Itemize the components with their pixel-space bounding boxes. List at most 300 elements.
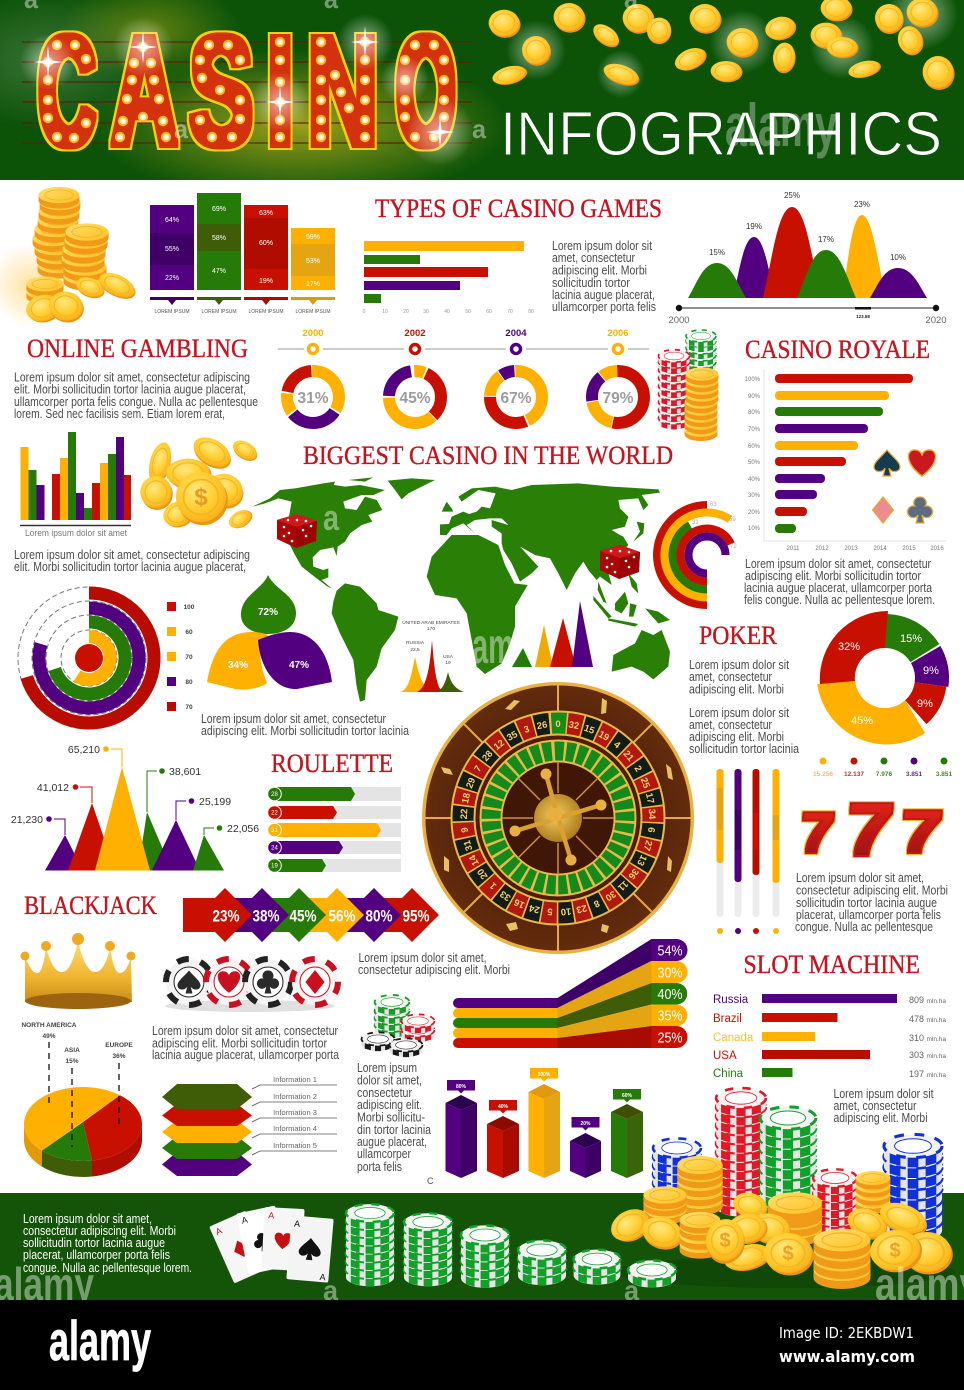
text block: narrow column: consectetur (357, 1086, 412, 1100)
wheel numbers: 29 (464, 776, 478, 790)
concentric arc chart (657, 502, 737, 605)
stacked bar chart: 60% (259, 240, 273, 247)
hexagon layers chart: Information 5 (273, 1141, 317, 1150)
text block: games: ullamcorper porta felis (552, 300, 656, 314)
card: ace of spades (286, 1215, 334, 1283)
peak callout chart (11, 744, 259, 870)
wheel numbers: 30 (603, 888, 618, 903)
donut 67% (490, 371, 542, 423)
percent arrow banner: 23% (212, 906, 240, 926)
header band (0, 0, 964, 200)
watermarks on map: am (472, 618, 514, 674)
credit text: url: www.alamy.com (779, 1347, 915, 1366)
donut 45% (389, 371, 441, 423)
country bar chart: 310 mln.ha (909, 1033, 946, 1043)
text block: chips: adipiscing elit. Morbi sollicitudin tortor (152, 1036, 327, 1050)
heading: roulette: ROULETTE (271, 749, 393, 778)
watermarks on map (323, 497, 514, 674)
wheel numbers: 11 (615, 878, 630, 893)
rounded horizontal bar chart: 70% (748, 427, 761, 433)
mini peak chart: countries: 19 (445, 660, 451, 666)
percent arrow banner: 45% (290, 906, 316, 926)
area peak chart 2000-2020: 25% (784, 191, 800, 200)
stacked bar chart: 22% (165, 275, 179, 282)
wheel numbers: 15 (582, 723, 597, 737)
bar 20%: 20% (580, 1121, 591, 1127)
poker legend: 3.851 (906, 771, 923, 778)
text block: footer band (23, 1212, 192, 1275)
text block: center: consectetur adipiscing elit. Morbi (358, 963, 510, 977)
world map (252, 477, 670, 702)
grouped bar chart: Lorem ipsum dolor sit amet (25, 528, 127, 538)
wheel numbers: 1 (487, 879, 499, 891)
roulette arrow bars: 28 (271, 792, 278, 798)
illustration: gold coin pile (606, 1156, 953, 1289)
peak callout chart: 38,601 (169, 766, 201, 778)
area peak chart 2000-2020: 17% (818, 235, 834, 244)
icon: spade (874, 450, 900, 476)
grouped bar chart (20, 432, 131, 538)
horizontal bar chart: 80 (528, 309, 534, 315)
concentric arc chart: 59 (729, 517, 736, 523)
text block: online gambling (14, 370, 258, 421)
ribbon chart: 54% (658, 942, 682, 960)
rounded horizontal bar chart: 2012 (815, 546, 829, 552)
title: casino marquee: N (307, 3, 378, 179)
area peak chart 2000-2020 (668, 191, 947, 326)
text block: games: sollicitudin tortor (552, 276, 630, 290)
wheel numbers: 6 (645, 827, 657, 833)
donut 67%: 67% (500, 390, 532, 407)
text block: footer band: sollicitudin tortor lacinia augue (23, 1236, 165, 1250)
title: casino marquee: C (38, 4, 96, 179)
stacked bar chart: 64% (165, 217, 179, 224)
text block: chips: Lorem ipsum dolor sit amet, consectetur (152, 1024, 338, 1038)
stacked bar chart: 58% (212, 235, 226, 242)
text block: map: Lorem ipsum dolor sit amet, consectetur (201, 712, 386, 726)
text block: narrow column: Morbi sollicitu- (357, 1110, 425, 1124)
ribbon chart: 40% (658, 986, 682, 1003)
stacked bar chart: 17% (306, 281, 320, 288)
heading: types of casino games: TYPES OF CASINO GAMES (375, 194, 662, 223)
3d pie chart: EUROPE (105, 1042, 133, 1049)
icon: die over asia (600, 545, 640, 579)
horizontal bar chart: 40 (444, 309, 450, 315)
rounded horizontal bar chart: 90% (748, 394, 761, 400)
text block: center: Lorem ipsum dolor sit amet, (358, 951, 486, 965)
heading: online gambling: ONLINE GAMBLING (27, 334, 248, 363)
text block: map: adipiscing elit. Morbi sollicitudin tortor lacinia (201, 724, 409, 738)
poker legend: 7.976 (876, 771, 893, 778)
title: casino marquee: A (111, 4, 178, 179)
poker donut chart: 32% (838, 641, 860, 653)
text block: narrow column: ullamcorper (357, 1147, 411, 1161)
peak callout chart: 25,199 (199, 796, 231, 808)
isometric 3d bars (446, 1068, 643, 1178)
petal venn chart (207, 575, 332, 689)
poker donut chart: 9% (923, 665, 939, 677)
mini peak chart: countries: UNITED ARAB EMIRATES (402, 620, 460, 626)
wheel numbers: 26 (536, 720, 548, 732)
wheel numbers: 18 (460, 792, 473, 805)
petal venn chart: 72% (258, 607, 278, 618)
title: infographics: INFOGRAPHICS (500, 100, 942, 169)
text block: royale: Lorem ipsum dolor sit amet, consectetur (745, 557, 931, 571)
country bar chart (713, 994, 946, 1080)
text block: poker: adipiscing elit. Morbi (689, 682, 784, 696)
stacked bar chart: 19% (259, 278, 273, 285)
area peak chart 2000-2020: 19% (746, 222, 762, 231)
wheel numbers: 19 (596, 729, 611, 744)
chip: heart (206, 959, 252, 1005)
text block: narrow column: dolor sit amet, (357, 1074, 422, 1088)
wheel numbers (459, 719, 657, 917)
mini peak chart: countries: RUSSIA (406, 640, 425, 646)
3d pie chart: 49% (42, 1033, 56, 1040)
wheel numbers: 25 (638, 776, 652, 791)
stacked bar chart: 63% (259, 210, 273, 217)
illustration: gold coin stacks (0, 187, 140, 327)
roulette wheel (422, 682, 694, 954)
horizontal bar chart: 0 (363, 309, 366, 315)
concentric arc chart: 31 (692, 520, 699, 526)
roulette arrow bars (268, 787, 401, 872)
bar 40% (487, 1100, 519, 1178)
credit logo: alamy (49, 1309, 151, 1372)
bar 80%: 80% (456, 1084, 467, 1090)
wheel numbers: 22 (459, 809, 470, 820)
3d pie chart: ASIA (64, 1047, 80, 1054)
card: ace of clubs: A (241, 1215, 248, 1226)
wheel numbers: 20 (475, 866, 490, 881)
stacked bar chart: LOREM IPSUM (154, 309, 190, 315)
stacked bar chart: LOREM IPSUM (248, 309, 284, 315)
illustration: scattered coins (140, 431, 261, 532)
mini peak chart: countries (400, 620, 464, 692)
wheel numbers: 24 (527, 902, 541, 915)
petal venn chart: 34% (228, 660, 248, 671)
concentric arc chart: 63 (710, 502, 717, 508)
watermarks in header: alamy (725, 92, 837, 159)
ribbon chart: 25% (658, 1030, 682, 1046)
text block: 777: Lorem ipsum dolor sit amet, (796, 871, 924, 885)
wheel numbers: 13 (634, 853, 649, 867)
illustration: gold coin pile: $ (719, 1230, 731, 1252)
rounded horizontal bar chart: 2016 (930, 546, 944, 552)
text block: narrow column: Lorem ipsum (357, 1061, 417, 1075)
stacked bar chart: 59% (306, 234, 320, 241)
illustration: gold coin pile: $ (889, 1240, 901, 1262)
illustration: crown (20, 933, 136, 1009)
card: ace of hearts: A (268, 1210, 274, 1221)
legend: 70 (185, 704, 193, 711)
illustration: playing cards (209, 1206, 334, 1283)
peak callout chart: 22,056 (227, 823, 259, 835)
wheel numbers: 12 (492, 738, 507, 753)
country bar chart: USA (713, 1050, 737, 1062)
country bar chart: Russia (713, 994, 749, 1006)
rounded horizontal bar chart: 2013 (844, 546, 858, 552)
timeline with donut charts: 2002 (404, 328, 426, 339)
poker donut chart: 15% (900, 633, 922, 645)
text block: poker: adipiscing elit. Morbi (689, 730, 784, 744)
hexagon layers chart (162, 1075, 337, 1176)
stacked bar chart: LOREM IPSUM (201, 309, 237, 315)
area peak chart 2000-2020: 23% (854, 200, 870, 209)
rounded horizontal bar chart: 2015 (902, 546, 916, 552)
text block: online gambling: lorem. Sed nec facilisis sem. Etiam lorem erat, (14, 407, 225, 421)
timeline with donut charts: 2006 (607, 328, 629, 339)
rounded horizontal bar chart: 2011 (787, 546, 800, 552)
title: casino marquee: S (189, 3, 253, 179)
poker legend (813, 758, 953, 778)
mini peak chart: countries: USA (443, 654, 454, 660)
title: casino marquee (22, 16, 472, 164)
watermarks in footer band: a (624, 1275, 639, 1306)
percent arrow banner (183, 888, 439, 942)
illustration: scattered coins: $ (194, 484, 208, 511)
donut 31% (287, 371, 339, 423)
3d pie chart: NORTH AMERICA (21, 1022, 77, 1029)
hexagon layers chart: Information 2 (273, 1092, 317, 1101)
peak callout chart: 21,230 (11, 814, 43, 826)
text block: games: adipiscing elit. Morbi (552, 264, 647, 278)
illustration: gold coin pile: $ (782, 1243, 794, 1265)
horizontal bar chart: 20 (403, 309, 409, 315)
card: ace of diamonds: A (214, 1225, 224, 1237)
text block: narrow column: din tortor lacinia (357, 1123, 431, 1137)
heading: poker: POKER (699, 621, 778, 650)
horizontal bar chart: 70 (507, 309, 513, 315)
watermarks in footer band (0, 1258, 964, 1310)
bar 100%: 100% (538, 1072, 551, 1078)
wheel numbers: 31 (462, 838, 475, 852)
text block: chips: lacinia augue placerat, ullamcorper porta (152, 1048, 339, 1062)
icon: card suits (873, 450, 936, 523)
horizontal bar chart (363, 241, 534, 315)
illustration: chips and coins stack (658, 330, 718, 441)
wheel numbers: 8 (592, 897, 601, 909)
text block: map (201, 712, 409, 738)
country bar chart: 478 mln.ha (909, 1014, 946, 1024)
poker legend: 3.851 (936, 771, 953, 778)
icon: club (907, 497, 933, 523)
text block: poker: amet, consectetur (689, 670, 772, 684)
illustration: 777 (797, 788, 946, 871)
text block: games: Lorem ipsum dolor sit (552, 239, 652, 253)
icon: heart (908, 450, 936, 476)
bar 60%: 60% (622, 1093, 633, 1099)
text block: games: lacinia augue placerat, (552, 288, 655, 302)
poker donut chart (813, 611, 953, 778)
poker donut chart: 9% (917, 698, 933, 710)
legend: 60 (185, 629, 193, 636)
hexagon layers chart: Information 3 (273, 1108, 317, 1117)
watermarks in header: a (174, 114, 189, 144)
bar 100% (528, 1068, 560, 1178)
watermarks in header (24, 0, 837, 159)
rounded horizontal bar chart: 100% (745, 377, 761, 383)
vertical progress bars (716, 769, 780, 934)
title: casino marquee: O (396, 4, 456, 179)
percent arrow banner: 80% (366, 906, 392, 926)
mini peak chart: countries: 170 (427, 626, 435, 632)
poker donut chart: 45% (851, 715, 873, 727)
3d pie chart (21, 1022, 142, 1177)
text block: 777: sollicitudin tortor lacinia augue (796, 896, 937, 910)
text block: narrow column: adipiscing elit. (357, 1098, 422, 1112)
timeline with donut charts: 2000 (302, 328, 324, 339)
falling gold coins (489, 0, 958, 98)
text block: online gambling: Lorem ipsum dolor sit amet, consectetur adipiscing (14, 370, 250, 384)
wheel numbers: 27 (641, 839, 654, 852)
heading: slot machine: SLOT MACHINE (744, 950, 920, 979)
legend (167, 602, 195, 711)
country bar chart: Canada (713, 1032, 754, 1044)
horizontal bar chart: 50 (465, 309, 471, 315)
rounded horizontal bar chart: 60% (748, 444, 761, 450)
bar 60% (611, 1089, 643, 1178)
text block: slot machine: amet, consectetur (834, 1099, 916, 1113)
icon: die over north america (277, 514, 317, 548)
area peak chart 2000-2020: 15% (709, 248, 725, 257)
illustration: small chip pile (362, 995, 434, 1057)
text block: royale: adipiscing elit. Morbi sollicitudin tortor (745, 569, 921, 583)
text block: narrow column: C (427, 1176, 434, 1186)
heading: biggest casino: BIGGEST CASINO IN THE WORLD (303, 441, 673, 470)
wheel numbers: 3 (523, 724, 531, 736)
legend: 80 (185, 679, 193, 686)
wheel numbers: 7 (472, 764, 484, 774)
ribbon chart (453, 939, 688, 1048)
ribbon chart: 35% (658, 1008, 682, 1024)
area peak chart 2000-2020: 10% (890, 253, 906, 262)
stacked bar chart: LOREM IPSUM (295, 309, 331, 315)
wheel numbers: 34 (646, 809, 657, 820)
stacked bar chart: 55% (165, 246, 179, 253)
illustration: 777: 7 (897, 799, 946, 865)
percent arrow banner: 56% (328, 906, 356, 926)
poker legend: 15.256 (813, 771, 833, 778)
text block: coins (14, 548, 250, 574)
footer band (0, 1193, 964, 1300)
country bar chart: China (713, 1068, 744, 1080)
text block: poker (689, 658, 799, 756)
card: ace of spades: A (319, 1272, 326, 1282)
chip: diamond (292, 959, 338, 1005)
timeline with donut charts (278, 328, 649, 423)
poker legend: 12.137 (844, 771, 864, 778)
peak callout chart: 65,210 (68, 744, 100, 756)
wheel numbers: 2 (632, 764, 644, 774)
roulette arrow bars: 22 (271, 810, 278, 816)
text block: 777: congue. Nulla ac pellentesque (795, 920, 933, 934)
rounded horizontal bar chart: 50% (748, 460, 761, 466)
text block: royale: lacinia augue placerat, ullamcorper porta (744, 581, 932, 595)
text block: narrow column: augue placerat, (357, 1135, 427, 1149)
watermarks on map: a (323, 497, 340, 538)
text block: footer band: placerat, ullamcorper porta felis (23, 1248, 170, 1262)
text block: coins: Lorem ipsum dolor sit amet, consectetur adipiscing (14, 548, 250, 562)
wheel numbers: 33 (498, 888, 513, 903)
illustration: poker chips row (165, 959, 338, 1012)
wheel numbers: 32 (568, 720, 580, 732)
hexagon layers chart: Information 4 (273, 1124, 317, 1133)
title: casino marquee: I (266, 4, 294, 179)
text block: online gambling: ullamcorper porta felis congue. Nulla ac pellentesque (14, 395, 258, 409)
rounded horizontal bar chart: 20% (748, 510, 761, 516)
illustration: green chip stacks (346, 1204, 676, 1288)
text block: online gambling: elit. Morbi sollicitudin tortor lacinia augue placerat, (14, 382, 246, 396)
credit text: image id: Image ID: 2EKBDW1 (779, 1324, 914, 1342)
text block: narrow column (357, 1061, 434, 1186)
legend: 100 (184, 604, 195, 611)
text block: poker: amet, consectetur (689, 718, 772, 732)
wheel numbers: 14 (467, 852, 482, 867)
text block: coins: elit. Morbi sollicitudin tortor lacinia augue placerat, (14, 560, 246, 574)
horizontal bar chart: 60 (486, 309, 492, 315)
concentric arc chart: 72 (730, 544, 737, 550)
3d pie chart: 15% (65, 1058, 79, 1065)
text block: footer band: congue. Nulla ac pellentesque lorem. (23, 1261, 192, 1275)
rounded horizontal bar chart (745, 370, 946, 552)
hexagon layers chart: Information 1 (273, 1075, 317, 1084)
wheel numbers: 21 (621, 749, 636, 764)
wheel numbers: 17 (643, 792, 656, 805)
rounded horizontal bar chart: 80% (748, 410, 761, 416)
text block: royale (744, 557, 935, 607)
3d pie chart: 36% (112, 1053, 126, 1060)
rounded horizontal bar chart: 10% (748, 526, 761, 532)
peak callout chart: 41,012 (37, 782, 69, 794)
text block: slot machine: Lorem ipsum dolor sit (834, 1087, 934, 1101)
donut 45%: 45% (399, 390, 431, 407)
stacked bar chart: 53% (306, 258, 320, 265)
area peak chart 2000-2020: 2020 (925, 315, 947, 326)
wheel numbers: 0 (555, 719, 561, 730)
roulette arrow bars: 31 (271, 828, 278, 834)
wheel numbers: 5 (546, 905, 553, 917)
radial bar chart (18, 587, 195, 729)
card: ace of spades: A (294, 1219, 301, 1229)
horizontal bar chart: 10 (382, 309, 388, 315)
black credit bar (0, 1300, 964, 1390)
wheel numbers: 16 (512, 896, 527, 910)
watermarks in footer band: a (323, 1275, 338, 1306)
mini peak chart: countries: 22,5 (410, 647, 420, 653)
text block: poker: Lorem ipsum dolor sit (689, 706, 789, 720)
legend: 70 (185, 654, 193, 661)
area peak chart 2000-2020: 2000 (668, 315, 690, 326)
heading: casino royale: CASINO ROYALE (745, 335, 930, 364)
icon: diamond (873, 497, 893, 523)
watermarks in header: a (472, 114, 487, 144)
chip: club (245, 959, 291, 1005)
ribbon chart: 30% (658, 964, 682, 982)
percent arrow banner: 38% (252, 906, 280, 926)
stacked bar chart (150, 193, 335, 315)
bar 20% (570, 1117, 601, 1178)
text block: footer band: consectetur adipiscing elit. Morbi (23, 1224, 176, 1238)
text block: poker: Lorem ipsum dolor sit (689, 658, 789, 672)
wheel numbers: 35 (505, 729, 520, 744)
text block: slot machine (834, 1087, 934, 1125)
wheel numbers: 10 (560, 905, 572, 917)
heading: blackjack: BLACKJACK (24, 891, 157, 920)
donut 79%: 79% (602, 390, 634, 407)
text block: games (552, 239, 656, 314)
text block: center (358, 951, 510, 977)
